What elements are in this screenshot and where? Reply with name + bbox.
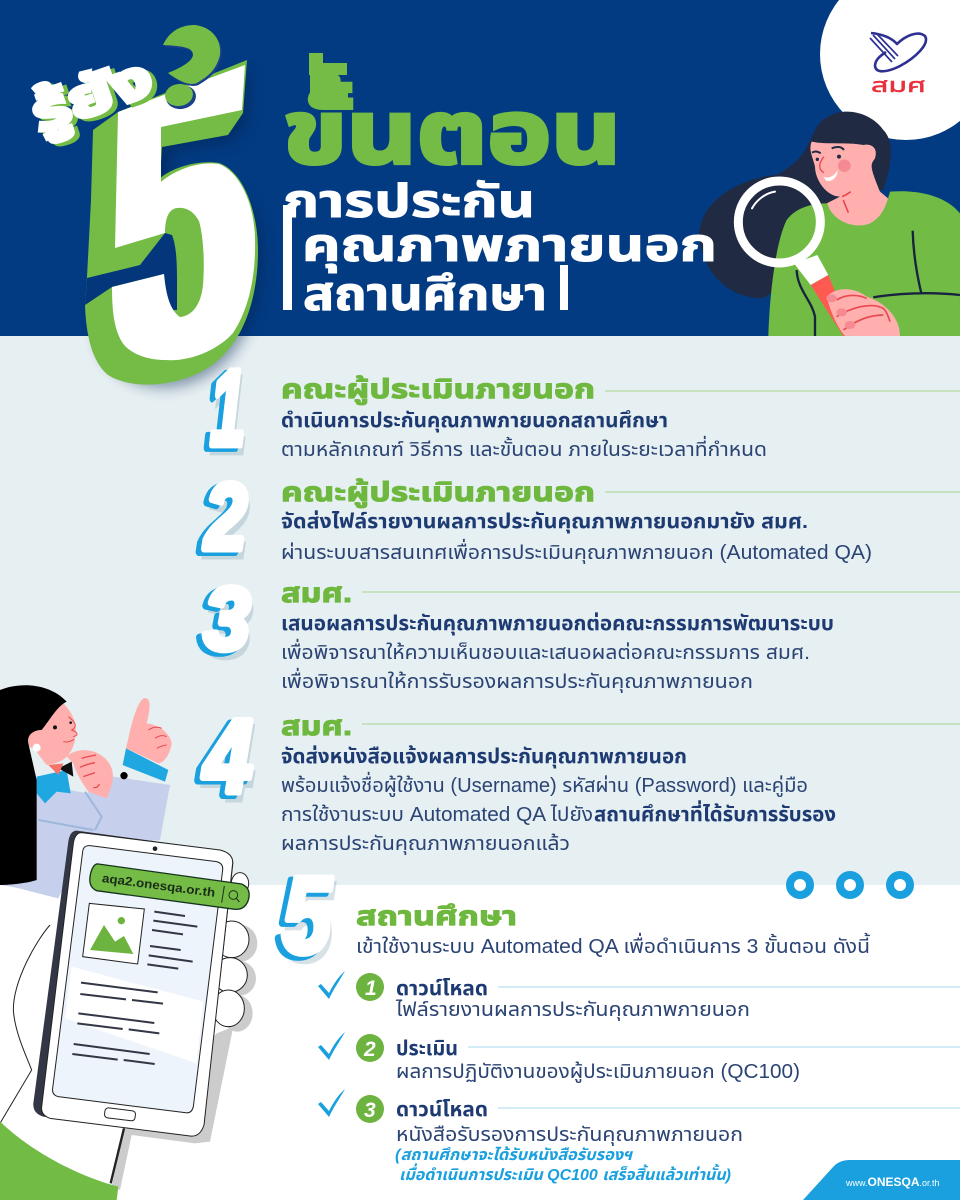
step 4 text bbox=[281, 711, 960, 855]
step 4 text: จัดส่งหนังสือแจ้งผลการประกันคุณภาพภายนอก bbox=[281, 746, 687, 768]
label: know yet: รู้ยัง bbox=[24, 47, 161, 146]
phone screen bbox=[53, 846, 223, 1113]
headline: external quality assurance: การประกัน bbox=[283, 175, 535, 227]
illustration: woman pointing and holding phone: aqa2.onesqa.or.th bbox=[101, 871, 216, 900]
logo text: สมศ bbox=[871, 75, 926, 97]
step 3 number: 3 bbox=[199, 574, 245, 672]
step 1 number: 1 bbox=[210, 348, 245, 468]
fingers bbox=[212, 873, 249, 1027]
sub-step 3 bbox=[318, 1089, 960, 1184]
face bbox=[32, 702, 76, 765]
header background bbox=[0, 0, 960, 336]
label: know yet: รู้ยัง bbox=[29, 50, 166, 149]
big number 5 bbox=[85, 60, 263, 387]
illustration: woman pointing and holding phone bbox=[0, 685, 257, 1200]
URL bar bbox=[90, 864, 249, 909]
step 3 number: 3 bbox=[204, 571, 250, 669]
jacket bbox=[0, 763, 170, 898]
sub-step 2: ผลการปฏิบัติงานของผู้ประเมินภายนอก (QC100) bbox=[396, 1060, 800, 1084]
dark counter of number 5 bbox=[85, 233, 177, 310]
right bracket bbox=[560, 265, 568, 310]
sub-step 1: ดาวน์โหลด bbox=[396, 978, 488, 1000]
picture placeholder bbox=[83, 903, 144, 964]
icon: organisation mark bbox=[870, 33, 926, 71]
step 5 text bbox=[356, 901, 870, 958]
step 2 text: จัดส่งไฟล์รายงานผลการประกันคุณภาพภายนอกมายัง สมศ. bbox=[281, 511, 808, 533]
step 5 number: 5 bbox=[283, 862, 334, 984]
bow bbox=[58, 762, 73, 777]
step 1 text: คณะผู้ประเมินภายนอก bbox=[281, 374, 595, 405]
step 1 text: ตามหลักเกณฑ์ วิธีการ และขั้นตอน ภายในระยะเวลาที่กำหนด bbox=[281, 435, 767, 461]
collar and cuff bbox=[37, 770, 71, 803]
headline: five steps bbox=[283, 53, 621, 182]
step 2 text: ผ่านระบบสารสนเทศเพื่อการประเมินคุณภาพภายนอก (Automated QA) bbox=[281, 538, 872, 564]
logo badge bbox=[820, 0, 960, 140]
step 1 text: ดำเนินการประกันคุณภาพภายนอกสถานศึกษา bbox=[281, 410, 668, 432]
step 3 text: เพื่อพิจารณาให้การรับรองผลการประกันคุณภาพภายนอก bbox=[281, 667, 753, 693]
sub-step 1 bbox=[318, 971, 960, 1021]
illustration: woman with magnifying glass bbox=[699, 112, 960, 336]
forearm edge bbox=[111, 1128, 124, 1183]
step 2 text bbox=[281, 477, 960, 564]
placeholder text lines bbox=[72, 912, 197, 1064]
headline: five steps: ขั้นตอน bbox=[283, 74, 621, 182]
sub-step 3: เมื่อดำเนินการประเมิน QC100 เสร็จสิ้นแล้วเท่านั้น) bbox=[399, 1163, 731, 1184]
phone body bbox=[33, 831, 233, 1136]
step 4 number: 4 bbox=[203, 706, 254, 822]
sub-step 2: ประเมิน bbox=[396, 1038, 458, 1060]
sub-step 3: หนังสือรับรองการประกันคุณภาพภายนอก bbox=[396, 1124, 743, 1146]
sub-step 1: ไฟล์รายงานผลการประกันคุณภาพภายนอก bbox=[395, 999, 750, 1021]
pointing hand bbox=[126, 698, 172, 763]
step 2 text: คณะผู้ประเมินภายนอก bbox=[281, 477, 595, 508]
decorative rings bbox=[790, 875, 910, 895]
sub-step 1: 1 bbox=[365, 977, 377, 1000]
content panel background bbox=[0, 336, 960, 885]
step 3 text: เพื่อพิจารณาให้ความเห็นชอบและเสนอผลต่อคณะกรรมการ สมศ. bbox=[281, 638, 810, 664]
left bracket bbox=[283, 205, 292, 310]
headline: external quality assurance bbox=[283, 175, 717, 320]
step 2 number: 2 bbox=[198, 468, 242, 573]
sleeve bbox=[0, 1122, 118, 1200]
step 3 text: เสนอผลการประกันคุณภาพภายนอกต่อคณะกรรมการพัฒนาระบบ bbox=[281, 613, 834, 635]
step 4 text: สถานศึกษาที่ได้รับการรับรอง bbox=[594, 800, 836, 826]
step 4 text: สมศ. bbox=[281, 711, 352, 741]
step 5 text: สถานศึกษา bbox=[356, 901, 517, 931]
step 4 text: ผลการประกันคุณภาพภายนอกแล้ว bbox=[281, 832, 570, 855]
step 5 text: เข้าใช้งานระบบ Automated QA เพื่อดำเนินการ 3 ขั้นตอน ดังนี้ bbox=[356, 932, 870, 958]
step 2 number: 2 bbox=[203, 465, 247, 570]
question mark bbox=[163, 25, 222, 111]
sub-step 3: ดาวน์โหลด bbox=[396, 1099, 488, 1121]
label: know yet bbox=[24, 46, 166, 150]
headline: external quality assurance: สถานศึกษา bbox=[303, 268, 547, 320]
headline: external quality assurance: คุณภาพภายนอก bbox=[302, 219, 717, 273]
step 2 number: 2 bbox=[204, 472, 248, 577]
step 5 number: 5 bbox=[282, 855, 333, 977]
footer website tab bbox=[803, 1160, 960, 1200]
step 5 number: 5 bbox=[277, 858, 328, 980]
sub-step 3: (สถานศึกษาจะได้รับหนังสือรับรองฯ bbox=[395, 1146, 633, 1164]
step 1 number: 1 bbox=[205, 351, 240, 471]
footer website tab: www.ONESQA.or.th bbox=[845, 1175, 940, 1189]
hand on chin bbox=[67, 750, 113, 798]
step 4 text: การใช้งานระบบ Automated QA ไปยัง bbox=[281, 803, 593, 826]
green extrusion bbox=[85, 60, 258, 385]
step 4 text: พร้อมแจ้งชื่อผู้ใช้งาน (Username) รหัสผ่าน (Password) และคู่มือ bbox=[281, 771, 808, 798]
hair bbox=[0, 685, 67, 885]
white face of number 5 bbox=[112, 65, 255, 360]
step 1 text bbox=[281, 374, 960, 461]
step 1 number: 1 bbox=[211, 355, 246, 475]
step 3 text bbox=[281, 578, 960, 693]
holding hand bbox=[0, 925, 125, 1200]
step 4 number: 4 bbox=[202, 699, 253, 815]
sub-step 2 bbox=[318, 1032, 960, 1084]
shadow of number 5 bbox=[92, 70, 263, 387]
sub-step 2: 2 bbox=[363, 1038, 376, 1061]
phone and finger shadow bbox=[112, 925, 257, 1190]
step 3 text: สมศ. bbox=[281, 578, 352, 608]
step 4 number: 4 bbox=[197, 702, 248, 818]
sub-step 3: 3 bbox=[364, 1099, 376, 1122]
step 3 number: 3 bbox=[205, 578, 251, 676]
